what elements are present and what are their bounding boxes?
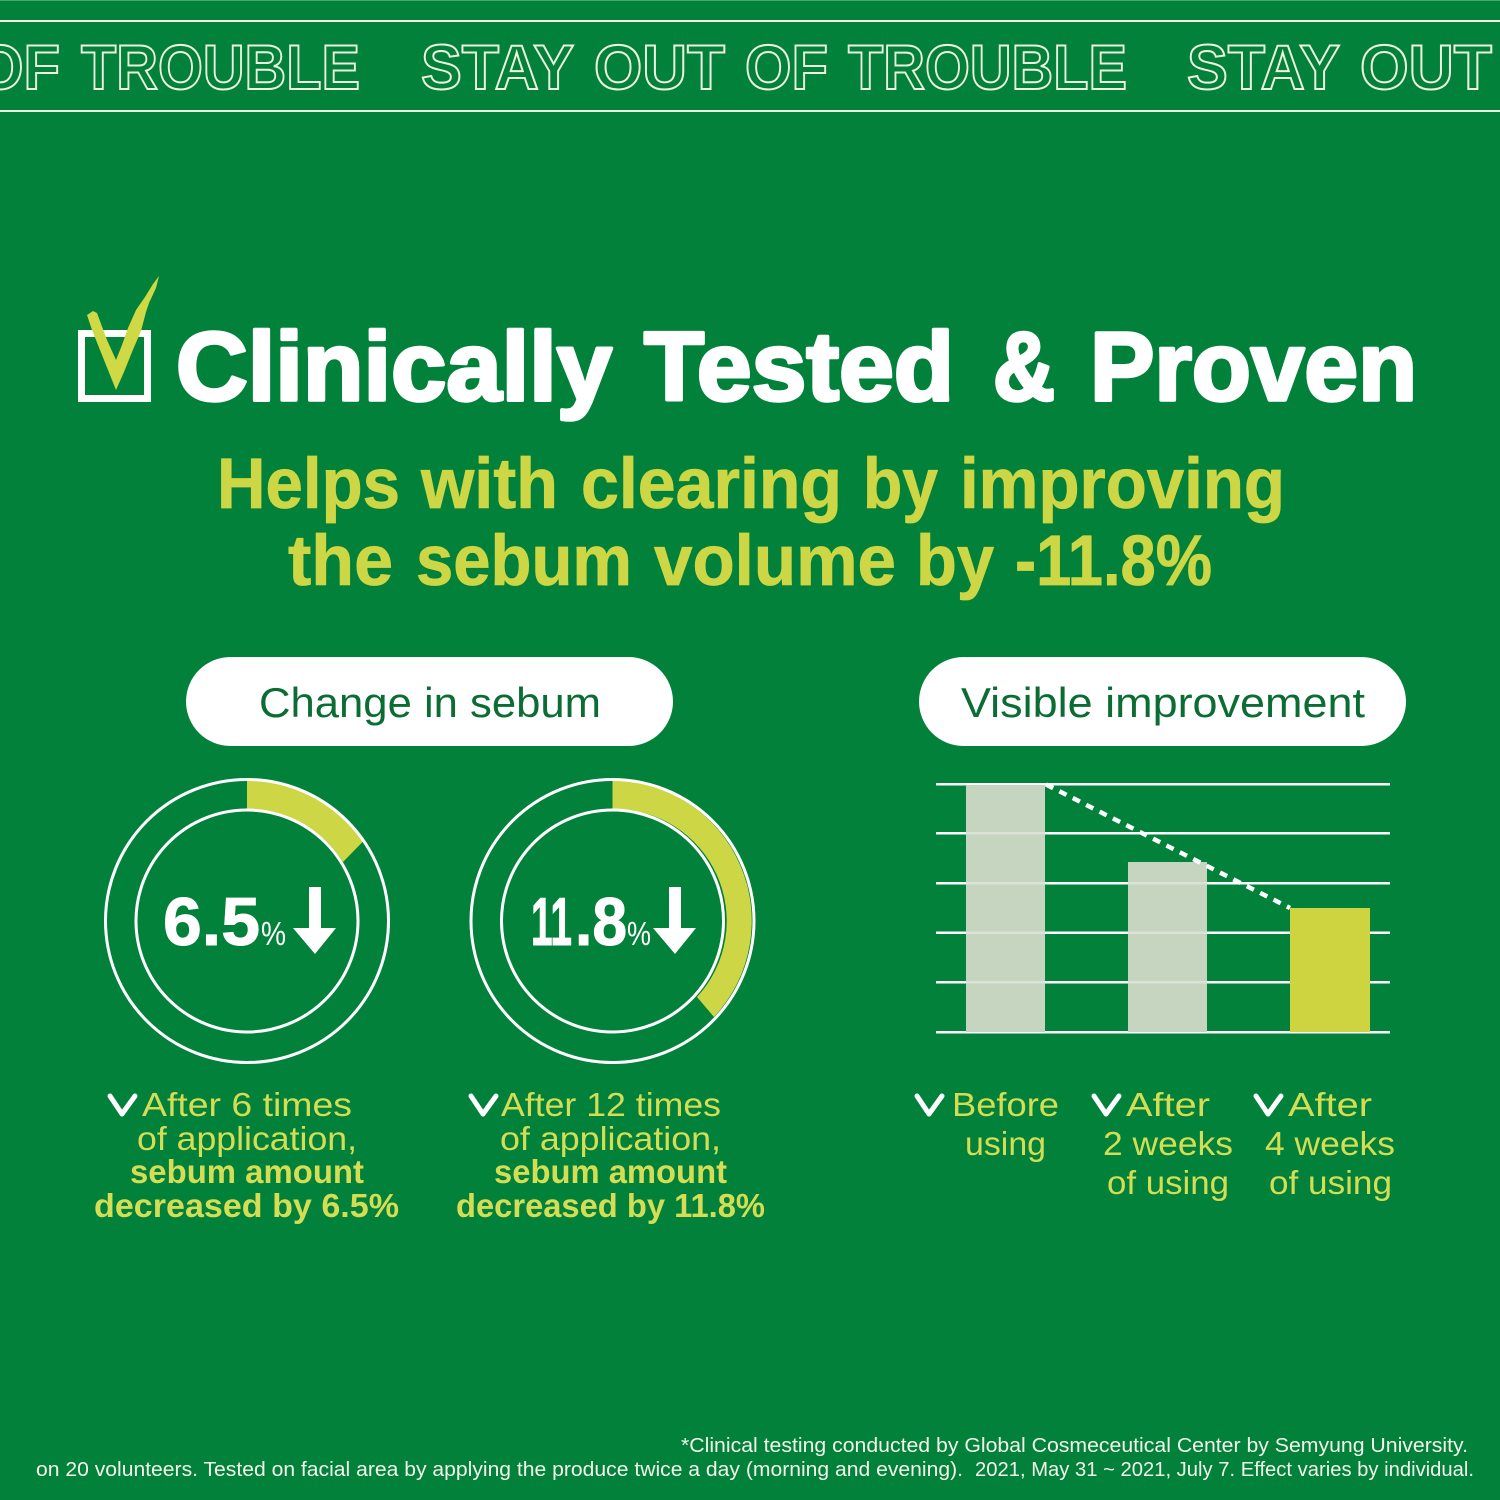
banner: stay out of trouble: TROUBLE: [81, 33, 360, 103]
donut chart: 11.8 percent: %: [627, 915, 651, 952]
subtitle: by: [916, 522, 994, 601]
caption: after 6 times: decreased by 6.5%: [94, 1187, 399, 1224]
subtitle: [217, 445, 1285, 601]
banner: stay out of trouble: STAY: [421, 33, 574, 103]
caption: before using: using: [965, 1125, 1046, 1162]
caption: after 6 times: of application,: [137, 1120, 357, 1157]
caption: after 12 times: After 12 times: [501, 1086, 721, 1123]
caption: after 2 weeks: 2 weeks: [1103, 1125, 1233, 1162]
caption: after 6 times: After 6 times: [142, 1086, 352, 1123]
pill heading: visible improvement: Visible improvement: [961, 679, 1365, 726]
donut chart: 6.5 percent: %: [261, 915, 286, 952]
caption: after 6 times: sebum amount: [130, 1153, 364, 1190]
donut chart: 6.5 percent: 6.5: [163, 884, 260, 960]
caption: after 4 weeks: [1256, 1086, 1395, 1201]
subtitle: volume: [654, 522, 896, 601]
title: &: [993, 312, 1055, 421]
caption: after 12 times: of application,: [500, 1120, 721, 1157]
banner: stay out of trouble: STAY: [1187, 33, 1340, 103]
caption: after 2 weeks: of using: [1107, 1164, 1229, 1201]
subtitle: Helps: [217, 445, 400, 524]
caption: after 4 weeks: After: [1288, 1086, 1372, 1123]
banner: stay out of trouble: OUT: [1360, 33, 1492, 103]
caption: after 6 times: [94, 1086, 399, 1224]
caption: after 2 weeks: After: [1126, 1086, 1210, 1123]
footnote: 2021, May 31 ~ 2021, July 7. Effect varies by individual.: [975, 1458, 1474, 1481]
footnote: [36, 1434, 1474, 1481]
caption: before using: [917, 1086, 1059, 1162]
subtitle: with: [420, 445, 558, 524]
banner: stay out of trouble: TROUBLE: [848, 33, 1127, 103]
subtitle: by: [863, 445, 938, 524]
caption: after 2 weeks: [1094, 1086, 1233, 1201]
donut chart: 11.8 percent: [471, 780, 754, 1062]
donut chart: 11.8 percent: 11: [531, 884, 572, 960]
title: Tested: [644, 312, 954, 421]
caption: before using: Before: [952, 1086, 1059, 1123]
subtitle: the: [288, 522, 393, 601]
caption: after 12 times: decreased by 11.8%: [456, 1187, 765, 1224]
footnote: on 20 volunteers. Tested on facial area by applying the produce twice a day (morning and evening).: [36, 1458, 963, 1481]
bar chart: visible improvement: [936, 783, 1390, 1034]
pill heading: visible improvement: [919, 657, 1406, 746]
banner: stay out of trouble: [0, 20, 1500, 112]
subtitle: sebum: [416, 522, 632, 601]
pill heading: change in sebum: [186, 657, 673, 746]
icon: checked box: [82, 276, 159, 398]
footnote: *Clinical testing conducted by Global Cosmeceutical Center by Semyung University.: [681, 1434, 1468, 1457]
caption: after 12 times: [456, 1086, 765, 1224]
caption: after 4 weeks: 4 weeks: [1265, 1125, 1395, 1162]
subtitle: -11.8%: [1015, 522, 1212, 601]
caption: after 12 times: sebum amount: [494, 1153, 727, 1190]
title: [176, 312, 1417, 421]
subtitle: clearing: [581, 445, 842, 524]
donut chart: 6.5 percent: [106, 780, 388, 1062]
donut chart: 11.8 percent: .8: [575, 884, 627, 960]
title: Proven: [1090, 312, 1417, 421]
title: Clinically: [176, 312, 612, 421]
caption: after 4 weeks: of using: [1269, 1164, 1392, 1201]
subtitle: improving: [960, 445, 1285, 524]
banner: stay out of trouble: OUT: [594, 33, 725, 103]
pill heading: change in sebum: Change in sebum: [259, 679, 601, 726]
banner: stay out of trouble: OF: [745, 33, 828, 103]
